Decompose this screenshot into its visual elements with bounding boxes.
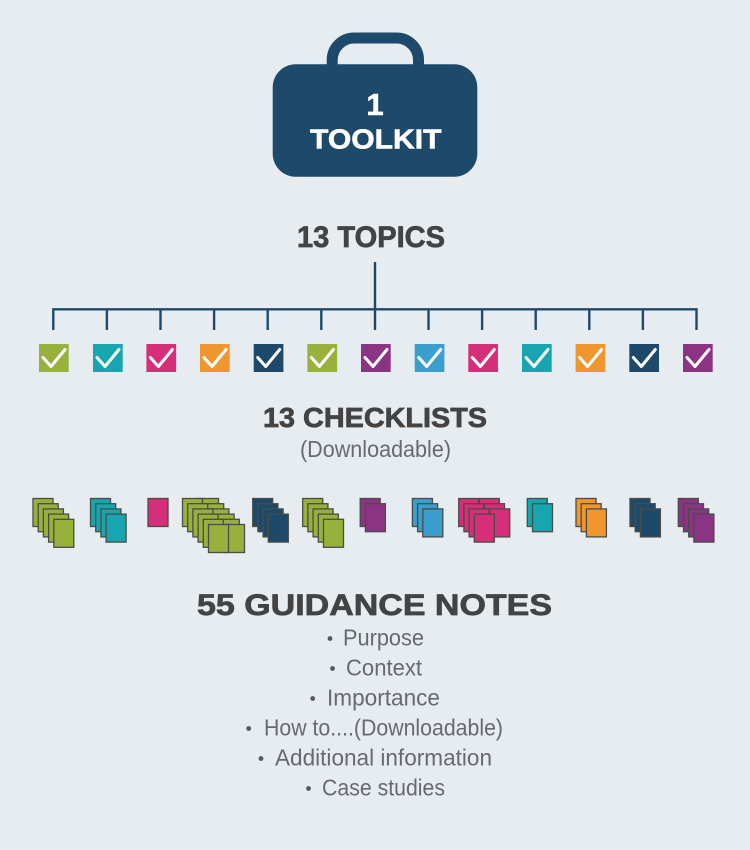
bullet list: How to....(Downloadable) <box>264 715 503 741</box>
stack 8: three blue notes <box>412 498 443 537</box>
heading: 13 checklists: 13 CHECKLISTS <box>263 402 487 433</box>
heading: 55 guidance notes: 55 GUIDANCE NOTES <box>197 589 552 622</box>
toolkit label: 1 <box>366 87 384 122</box>
stack 6: five green notes <box>303 498 344 547</box>
toolkit label <box>310 87 442 154</box>
subheading: downloadable: (Downloadable) <box>300 436 451 462</box>
icon: toolkit briefcase <box>273 38 477 177</box>
stack 9: double column of pink notes <box>459 498 510 542</box>
stack 4: double column of green notes <box>182 498 244 552</box>
stack 1: five green notes <box>33 498 74 547</box>
stack 2: four teal notes <box>90 498 126 542</box>
toolkit label: TOOLKIT <box>310 124 442 154</box>
tree connector <box>53 262 697 330</box>
bullet list: Purpose <box>343 625 424 651</box>
stack 7: two purple notes <box>360 498 385 532</box>
checkbox row <box>39 344 713 372</box>
stack 12: three navy notes <box>630 498 660 537</box>
stack 5: four navy notes <box>253 498 288 542</box>
bullet list: Context <box>346 655 423 681</box>
bullet list: Case studies <box>322 775 445 801</box>
bullet list: Importance <box>327 685 440 711</box>
document stacks <box>33 498 714 552</box>
stack 3: one pink note <box>148 498 168 526</box>
stack 11: three orange notes <box>576 498 606 537</box>
bullet list <box>246 625 503 801</box>
stack 10: two teal notes <box>527 498 552 532</box>
stack 13: four purple notes <box>678 498 714 542</box>
heading: 13 topics: 13 TOPICS <box>297 221 445 254</box>
bullet list: Additional information <box>275 745 492 771</box>
